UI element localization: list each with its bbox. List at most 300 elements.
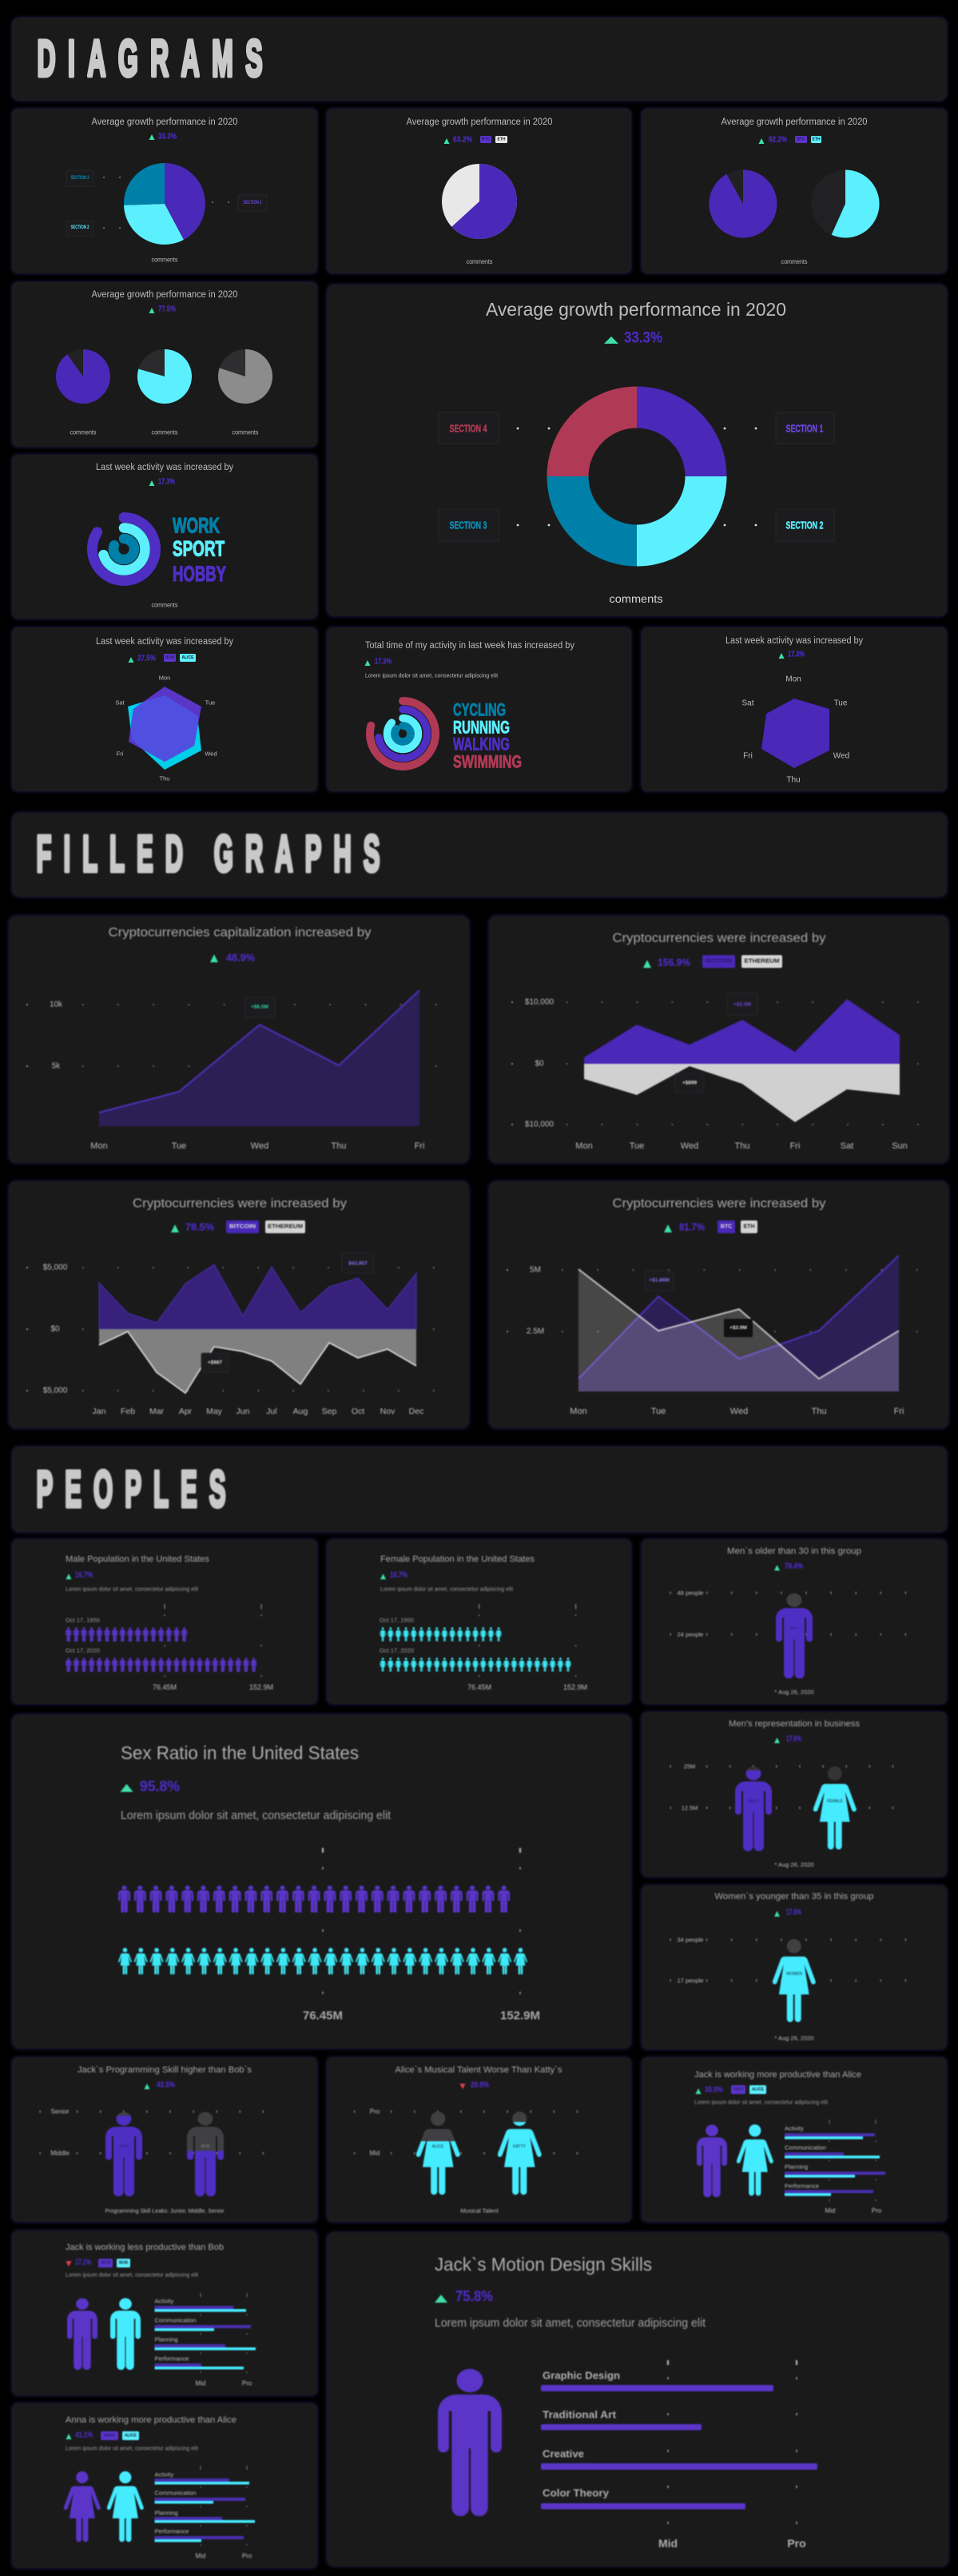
stat: 17.1%: 17.1% xyxy=(75,2259,91,2267)
label: section 2 xyxy=(66,221,93,236)
label: section 1 xyxy=(238,195,267,211)
bars: performance: Performance xyxy=(155,2527,189,2535)
title: Women`s younger than 35 in this group xyxy=(714,1892,874,1901)
area chart xyxy=(99,990,419,1126)
axis labels: Wed xyxy=(205,750,217,758)
stat: 33.3%: 33.3% xyxy=(158,133,177,141)
stat: 17.3%: 17.3% xyxy=(375,657,392,667)
scale labels: Mid xyxy=(196,2380,205,2387)
captions: comments xyxy=(70,428,96,436)
description: Lorem ipsum dolor sit amet, consectetur adipiscing elit xyxy=(380,1587,513,1592)
row label: 2020: Oct 17, 2020 xyxy=(66,1646,100,1654)
x axis: Nov xyxy=(380,1407,396,1416)
bars: communication xyxy=(155,2489,245,2503)
bars: planning: Planning xyxy=(155,2510,178,2516)
stat: 95.8%: 95.8% xyxy=(140,1778,180,1794)
badge: ETHEREUM: ETHEREUM xyxy=(268,1224,303,1229)
stat: 28.8% xyxy=(460,2081,489,2089)
stat: 78.4% xyxy=(774,1562,803,1571)
badge: BITCOIN xyxy=(226,1220,259,1233)
stat: 92.2% xyxy=(759,136,787,144)
title: Average growth performance in 2020 xyxy=(91,290,238,300)
stat: 95.8% xyxy=(120,1778,180,1794)
title: Last week activity was increased by xyxy=(96,463,233,472)
figure: woman: FEMALE xyxy=(827,1799,844,1804)
x axis xyxy=(93,1407,423,1416)
panel: jack vs alice productivity xyxy=(642,2057,947,2222)
scale labels: Pro xyxy=(872,2208,882,2214)
x axis: Feb xyxy=(121,1407,135,1416)
axis labels xyxy=(682,1763,698,1811)
stat: 17.3%: 17.3% xyxy=(788,651,805,659)
tooltip: bitcoin: +$2.5M xyxy=(733,1002,751,1007)
figure: woman xyxy=(773,1939,816,2022)
bars: communication xyxy=(155,2316,251,2331)
bar: creative xyxy=(541,2447,817,2470)
captions xyxy=(70,428,259,436)
caption: comments xyxy=(152,601,177,609)
badge: ETH: ETH xyxy=(497,137,506,142)
title: Cryptocurrencies capitalization increased by xyxy=(109,926,372,940)
figure: woman: WOMEN xyxy=(786,1972,802,1977)
date: * Aug 26, 2020 xyxy=(774,1688,814,1696)
badge: ALICE: ALICE xyxy=(752,2088,765,2092)
axis labels xyxy=(50,2108,70,2156)
stat: 78.5% xyxy=(171,1221,214,1232)
radial chart xyxy=(370,701,435,766)
tooltip: btc: +$1.86M xyxy=(649,1277,670,1284)
stat: 16.7% xyxy=(380,1571,407,1579)
axis labels: 12.5M xyxy=(682,1805,698,1811)
scale labels: 76.45M xyxy=(303,2009,343,2022)
pie chart xyxy=(124,163,205,245)
tooltip: eth: +$3.9M xyxy=(729,1325,747,1331)
axis labels: 5k xyxy=(52,1061,61,1071)
figure: woman xyxy=(813,1766,857,1849)
badge: BITCOIN: BITCOIN xyxy=(229,1224,256,1229)
x axis: Fri xyxy=(415,1141,424,1151)
x axis xyxy=(575,1141,908,1151)
x axis: Mon xyxy=(575,1141,593,1151)
panel: week diverging chart xyxy=(489,916,948,1163)
x axis: Wed xyxy=(681,1141,698,1151)
description: Lorem ipsum dolor sit amet, consectetur adipiscing elit xyxy=(694,2100,828,2105)
badge: JACK xyxy=(98,2259,113,2267)
radar chart xyxy=(761,699,829,768)
badge: BTC: BTC xyxy=(721,1224,732,1229)
axis labels: Thu xyxy=(160,775,169,782)
scale labels xyxy=(303,2009,540,2022)
axis labels: Tue xyxy=(205,699,215,707)
bar: traditional art: Traditional Art xyxy=(543,2409,617,2420)
caption: Programming Skill Leaks: Junior, Middle, Senior xyxy=(105,2208,225,2214)
stat: 16.7% xyxy=(66,1571,93,1579)
axis labels: $10,000 xyxy=(525,997,555,1007)
caption: Musical Talent xyxy=(460,2208,499,2214)
axis labels: 48 people xyxy=(678,1589,703,1597)
panel: single radar xyxy=(642,627,947,791)
x axis: Sep xyxy=(322,1407,336,1416)
x axis: Wed xyxy=(251,1141,268,1151)
title: Jack is working more productive than Alice xyxy=(694,2070,861,2080)
scale labels xyxy=(825,2208,882,2214)
stat: 43.5%: 43.5% xyxy=(157,2081,175,2089)
badge: JACK: JACK xyxy=(733,2088,744,2092)
panel: pie chart with sections xyxy=(12,109,317,273)
title: Jack`s Motion Design Skills xyxy=(435,2254,652,2275)
scale labels: 152.9M xyxy=(249,1683,273,1691)
bar: color theory: Color Theory xyxy=(543,2487,610,2498)
x axis: Mon xyxy=(570,1407,587,1416)
bar: graphic design xyxy=(541,2369,773,2391)
axis labels xyxy=(115,675,217,782)
legend xyxy=(453,700,522,772)
title: Cryptocurrencies were increased by xyxy=(612,932,826,945)
people row: men xyxy=(118,1885,510,1913)
figure: man purple xyxy=(67,2298,97,2370)
panel: male population xyxy=(12,1539,317,1704)
stat: 16.7%: 16.7% xyxy=(75,1571,93,1579)
x axis xyxy=(90,1141,424,1151)
description: Lorem ipsum dolor sit amet, consectetur adipiscing elit xyxy=(365,673,498,679)
title: Sex Ratio in the United States xyxy=(121,1742,359,1763)
stat: 33.3% xyxy=(149,133,177,141)
panel: women younger than 35 xyxy=(642,1885,947,2049)
panel: men older than 30 xyxy=(642,1539,947,1704)
stat: 17.6%: 17.6% xyxy=(786,1909,801,1917)
axis labels: $0 xyxy=(50,1325,60,1333)
description: Lorem ipsum dolor sit amet, consectetur adipiscing elit xyxy=(66,2273,198,2278)
scale labels: Mid xyxy=(825,2208,835,2214)
title: Total time of my activity in last week has increased by xyxy=(365,641,574,651)
badge: ETHEREUM xyxy=(741,955,782,968)
x axis xyxy=(570,1407,904,1416)
heading panel: peoples xyxy=(12,1447,947,1532)
title: Jack is working less productive than Bob xyxy=(66,2243,224,2252)
x axis: Dec xyxy=(409,1407,423,1416)
area: btc xyxy=(578,1256,899,1392)
tooltip: ethereum xyxy=(675,1073,704,1093)
tooltip: btc xyxy=(645,1271,674,1291)
bar: graphic design: Graphic Design xyxy=(543,2369,620,2382)
stat: 77.5% xyxy=(149,305,176,313)
badge: ALICE: ALICE xyxy=(182,655,194,660)
badge: BTC xyxy=(718,1220,735,1233)
title: Average growth performance in 2020 xyxy=(91,117,238,127)
axis labels: 34 people xyxy=(678,1936,703,1944)
panel: two pies xyxy=(642,109,947,273)
bars: activity: Activity xyxy=(155,2297,174,2305)
stat: 17.6% xyxy=(774,1909,801,1917)
legend: WORK xyxy=(173,513,220,537)
bars: activity xyxy=(155,2471,249,2484)
line: btc xyxy=(578,1256,899,1379)
heading panel: filled graphs: FILLED GRAPHS xyxy=(37,825,392,882)
people row: 1950 xyxy=(380,1627,502,1642)
figure: woman xyxy=(737,2124,773,2196)
x axis: Aug xyxy=(293,1407,308,1416)
panel: three pies xyxy=(12,282,317,447)
people row: 2020 xyxy=(380,1658,571,1672)
description: Lorem ipsum dolor sit amet, consectetur adipiscing elit xyxy=(435,2317,706,2330)
stat: 43.5% xyxy=(144,2081,175,2089)
tooltip: ethereum: +$899 xyxy=(682,1081,698,1085)
label: section 4: SECTION 4 xyxy=(449,422,487,435)
stat: 17.3% xyxy=(778,651,805,659)
badge: BTC: BTC xyxy=(482,137,491,142)
figure: katty: KATTY xyxy=(513,2144,527,2149)
axis labels: Wed xyxy=(833,751,849,761)
axis labels: Mid xyxy=(370,2150,380,2156)
area: ethereum xyxy=(99,1329,416,1393)
label: section 1 xyxy=(776,412,834,444)
section: diagrams xyxy=(12,18,947,791)
scale labels: 152.9M xyxy=(500,2009,540,2022)
badge: ETH xyxy=(495,136,507,143)
people row: 2020 xyxy=(66,1658,256,1672)
stat: 75.8%: 75.8% xyxy=(455,2288,493,2304)
panel: capitalization area chart xyxy=(9,916,469,1163)
x axis: Thu xyxy=(735,1141,749,1151)
tooltip: ethereum xyxy=(201,1353,229,1372)
x axis: Oct xyxy=(352,1407,364,1416)
panel: total time radial chart xyxy=(327,627,631,791)
axis labels xyxy=(43,1263,68,1395)
caption: comments xyxy=(467,258,492,265)
axis labels: Fri xyxy=(117,750,124,758)
x axis: May xyxy=(206,1407,223,1416)
stat: 156.9%: 156.9% xyxy=(658,956,690,969)
people row: women xyxy=(118,1948,527,1974)
bars: communication: Communication xyxy=(155,2489,197,2497)
panel: overlapping area chart xyxy=(489,1181,948,1428)
label: section 1: SECTION 1 xyxy=(243,201,262,205)
legend: RUNNING xyxy=(453,718,510,738)
bars: performance xyxy=(155,2355,244,2369)
tooltip: bitcoin xyxy=(727,993,757,1015)
axis labels: Mon xyxy=(159,675,170,681)
stat: 33.3% xyxy=(604,329,662,347)
axis labels: Sat xyxy=(115,699,125,707)
tooltip: ethereum: +$987 xyxy=(208,1360,223,1365)
title: Jack`s Programming Skill higher than Bob`s xyxy=(78,2065,252,2075)
stat: 75.8% xyxy=(435,2288,493,2304)
badge: ALICE xyxy=(749,2085,766,2094)
label: section 2: SECTION 2 xyxy=(70,225,89,230)
label: section 3: SECTION 3 xyxy=(449,520,487,531)
axis labels: 5M xyxy=(530,1266,541,1274)
stat: 33.3%: 33.3% xyxy=(624,329,662,347)
bar: creative: Creative xyxy=(543,2447,584,2460)
tooltip: +$6.5M xyxy=(251,1004,268,1010)
title: Average growth performance in 2020 xyxy=(486,299,786,320)
tooltip: eth xyxy=(724,1319,753,1337)
pie chart: cyan xyxy=(137,349,192,404)
scale labels xyxy=(658,2537,806,2550)
badge: JACK xyxy=(731,2085,745,2094)
x axis: Apr xyxy=(179,1407,193,1416)
x axis: Fri xyxy=(790,1141,800,1151)
label: section 2: SECTION 2 xyxy=(786,520,823,531)
axis labels: 2.5M xyxy=(527,1327,544,1336)
badge: ETH xyxy=(741,1220,757,1233)
pie chart xyxy=(442,164,517,239)
stat: 41.1% xyxy=(66,2431,93,2439)
axis labels: 10k xyxy=(50,1001,63,1009)
tooltip xyxy=(244,997,275,1017)
scale labels: 152.9M xyxy=(563,1683,587,1691)
stat: 17.3% xyxy=(364,657,392,667)
axis labels xyxy=(50,1001,63,1071)
badge: ALICE: ALICE xyxy=(125,2433,137,2438)
x axis: Tue xyxy=(651,1407,666,1416)
pie chart: purple xyxy=(56,349,110,404)
figure: katty xyxy=(498,2112,542,2195)
caption: comments xyxy=(781,258,807,265)
stat: 63.2%: 63.2% xyxy=(453,136,472,144)
scale labels: Pro xyxy=(787,2537,806,2550)
badge: ETH xyxy=(811,136,821,143)
heading panel: diagrams xyxy=(12,18,947,101)
axis labels: Mon xyxy=(785,675,801,684)
x axis: Jan xyxy=(93,1407,106,1416)
scale labels: Pro xyxy=(242,2380,252,2387)
pie chart: purple xyxy=(709,169,777,238)
pie chart: cyan xyxy=(812,169,880,238)
stat: 28.8%: 28.8% xyxy=(471,2081,489,2089)
badge: BOB xyxy=(164,654,176,662)
bars: communication: Communication xyxy=(785,2144,826,2152)
bars: communication: Communication xyxy=(155,2316,197,2324)
figure: woman cyan xyxy=(107,2471,144,2542)
section: peoples xyxy=(12,1447,948,2568)
row label: 2020: Oct 17, 2020 xyxy=(380,1646,414,1654)
stat: 27.5% xyxy=(128,654,156,663)
scale labels xyxy=(196,2380,252,2387)
panel: donut chart xyxy=(327,285,947,616)
badge: BITCOIN: BITCOIN xyxy=(706,959,732,964)
title: Men`s older than 30 in this group xyxy=(727,1547,861,1556)
area: ethereum xyxy=(584,1064,900,1122)
heading panel: filled graphs xyxy=(12,813,947,897)
badge: JACK: JACK xyxy=(100,2260,111,2265)
bars: performance: Performance xyxy=(785,2182,819,2190)
line: ethereum xyxy=(99,1332,416,1393)
tooltip: bitcoin xyxy=(342,1252,374,1273)
x axis: Thu xyxy=(332,1141,346,1151)
stat: 41.1%: 41.1% xyxy=(75,2431,93,2439)
bars: communication xyxy=(785,2144,880,2158)
badge: ETHEREUM xyxy=(265,1220,305,1233)
badge: BTC xyxy=(480,136,491,143)
heading panel: peoples: PEOPLES xyxy=(37,1460,238,1518)
stat: 35.9%: 35.9% xyxy=(705,2086,723,2094)
bars: activity xyxy=(155,2297,246,2311)
bars: performance: Performance xyxy=(155,2355,189,2363)
figure: alice: ALICE xyxy=(432,2144,444,2149)
badge: BITCOIN xyxy=(702,955,735,968)
title: Last week activity was increased by xyxy=(725,636,863,646)
panel: year diverging chart xyxy=(9,1181,469,1428)
legend xyxy=(173,513,226,586)
badge: BTC xyxy=(795,136,807,143)
scale labels xyxy=(467,1683,587,1691)
figure: man cyan xyxy=(110,2298,141,2370)
axis labels: 17 people xyxy=(678,1977,703,1984)
x axis: Sat xyxy=(841,1141,853,1151)
axis labels: Fri xyxy=(743,751,753,761)
panel: radial activity chart xyxy=(12,455,317,619)
area line xyxy=(99,990,419,1113)
row label: 1950: Oct 17, 1950 xyxy=(380,1616,414,1624)
scale labels xyxy=(196,2553,252,2559)
x axis: Tue xyxy=(630,1141,644,1151)
panel: sex ratio xyxy=(12,1714,631,2048)
stat: 48.9%: 48.9% xyxy=(226,951,255,964)
legend: CYCLING xyxy=(453,700,506,720)
bars: activity xyxy=(785,2124,875,2139)
bars: planning: Planning xyxy=(155,2335,178,2343)
bars: planning: Planning xyxy=(785,2163,808,2171)
figure: man xyxy=(735,1766,772,1851)
x axis: Jun xyxy=(237,1407,250,1416)
figure: man xyxy=(438,2369,502,2516)
badge: BOB xyxy=(117,2259,130,2267)
label: section 3: SECTION 3 xyxy=(70,176,89,181)
figure: man: MEN xyxy=(790,1626,798,1630)
axis labels: 25M xyxy=(684,1763,695,1770)
figure: alice xyxy=(416,2112,460,2195)
bars: activity: Activity xyxy=(785,2124,804,2132)
scale labels xyxy=(153,1683,273,1691)
axis labels xyxy=(678,1936,703,1984)
badge: ANNA: ANNA xyxy=(104,2433,116,2438)
caption: comments xyxy=(152,256,177,264)
title: Alice`s Musical Talent Worse Than Katty`s xyxy=(395,2065,562,2075)
panel: jack vs bob productivity xyxy=(12,2231,317,2395)
badge: ETH: ETH xyxy=(812,137,821,142)
x axis: Mon xyxy=(90,1141,108,1151)
figure: man xyxy=(776,1594,813,1678)
area: eth xyxy=(578,1269,899,1392)
x axis: Wed xyxy=(730,1407,748,1416)
scale labels: Mid xyxy=(658,2537,678,2550)
axis labels: Tue xyxy=(834,699,848,708)
axis labels: Sat xyxy=(741,699,754,708)
axis labels: Thu xyxy=(786,775,801,785)
legend: SPORT xyxy=(173,536,225,560)
label: section 2 xyxy=(776,509,834,541)
title: Female Population in the United States xyxy=(380,1555,535,1564)
panel: musical talent xyxy=(327,2057,631,2222)
x axis: Mar xyxy=(149,1407,165,1416)
panel: female population xyxy=(327,1539,631,1704)
captions: comments xyxy=(152,428,177,436)
badge: BTC: BTC xyxy=(797,137,805,142)
badge: ANNA xyxy=(101,2431,118,2440)
stat: 77.5%: 77.5% xyxy=(158,305,176,313)
bars: planning xyxy=(155,2510,255,2522)
axis labels: $0 xyxy=(535,1060,544,1068)
stat: 17.1% xyxy=(66,2259,91,2267)
scale labels: 76.45M xyxy=(153,1683,177,1691)
captions: comments xyxy=(232,428,259,436)
x axis: Jul xyxy=(266,1407,277,1416)
title: Average growth performance in 2020 xyxy=(721,117,868,127)
axis labels xyxy=(527,1266,544,1336)
panel: motion design skills xyxy=(327,2232,948,2566)
badge: ALICE xyxy=(122,2431,139,2440)
